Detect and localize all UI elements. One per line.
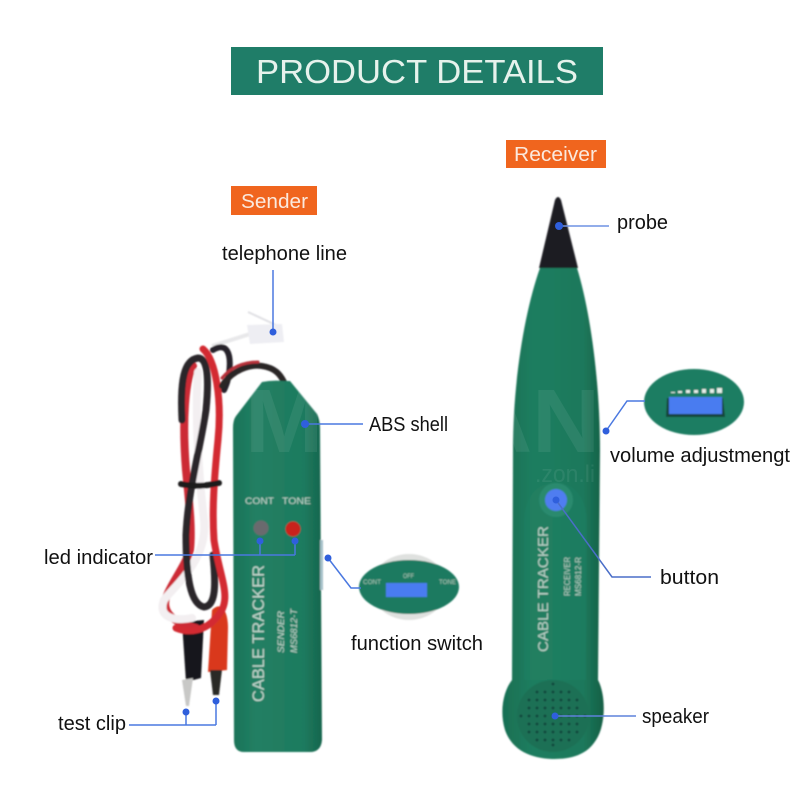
- led lights: [254, 520, 300, 536]
- callout: function switch: [359, 554, 459, 620]
- telephone plug: [212, 312, 284, 346]
- label: ABS shell: ABS shell: [369, 414, 448, 436]
- button panel: [524, 482, 587, 680]
- speaker grille: [517, 680, 589, 752]
- label: led indicator: led indicator: [44, 547, 153, 569]
- leader: telephone line: [270, 270, 276, 336]
- callout: function switch: CONT: [363, 580, 381, 586]
- label: function switch: function switch: [351, 633, 483, 655]
- label: button: button: [660, 567, 719, 589]
- title banner: [231, 47, 603, 95]
- receiver tag: [506, 140, 606, 168]
- leader: test clip: [129, 698, 220, 725]
- label: test clip: test clip: [58, 713, 126, 735]
- leader: function switch: [324, 554, 361, 588]
- alligator clips: [182, 606, 228, 706]
- receiver printed text: [535, 526, 583, 652]
- leader: led indicator: [155, 538, 298, 555]
- sender printed text: CONT: [245, 496, 274, 507]
- label: probe: probe: [617, 212, 668, 234]
- receiver printed text: MS6812-R: [573, 557, 583, 596]
- test lead wires: [162, 347, 284, 631]
- sender body: [233, 381, 322, 752]
- callout: function switch: OFF: [403, 574, 414, 580]
- sender printed text: SENDER: [276, 611, 287, 653]
- title banner: PRODUCT DETAILS: [256, 53, 578, 90]
- leader: speaker: [552, 712, 636, 720]
- receiver printed text: CABLE TRACKER: [535, 526, 552, 652]
- leader: button: [552, 496, 651, 577]
- callout: function switch: TONE: [439, 580, 456, 586]
- leader: ABS shell: [301, 420, 363, 428]
- receiver device: [502, 197, 604, 759]
- watermark: MOBAN: [245, 372, 600, 472]
- probe tip: [539, 197, 578, 268]
- receiver printed text: RECEIVER: [562, 557, 572, 596]
- sender printed text: TONE: [282, 496, 311, 507]
- sender tag: [231, 186, 317, 215]
- receiver body: [502, 268, 604, 759]
- watermark: .zon.li: [535, 461, 595, 488]
- callout: volume display: [644, 369, 744, 435]
- label: speaker: speaker: [642, 706, 709, 728]
- sender printed text: MS6812-T: [289, 608, 300, 653]
- leader: probe: [555, 222, 609, 230]
- sender device with wires: [162, 312, 323, 752]
- sender tag: Sender: [241, 191, 308, 213]
- receiver tag: Receiver: [514, 144, 597, 166]
- sender printed text: [245, 496, 311, 702]
- label: telephone line: telephone line: [222, 243, 347, 265]
- leader: volume: [602, 401, 645, 434]
- label: volume adjustmengt: volume adjustmengt: [610, 445, 790, 467]
- blue button: [539, 483, 573, 517]
- sender printed text: CABLE TRACKER: [249, 565, 268, 702]
